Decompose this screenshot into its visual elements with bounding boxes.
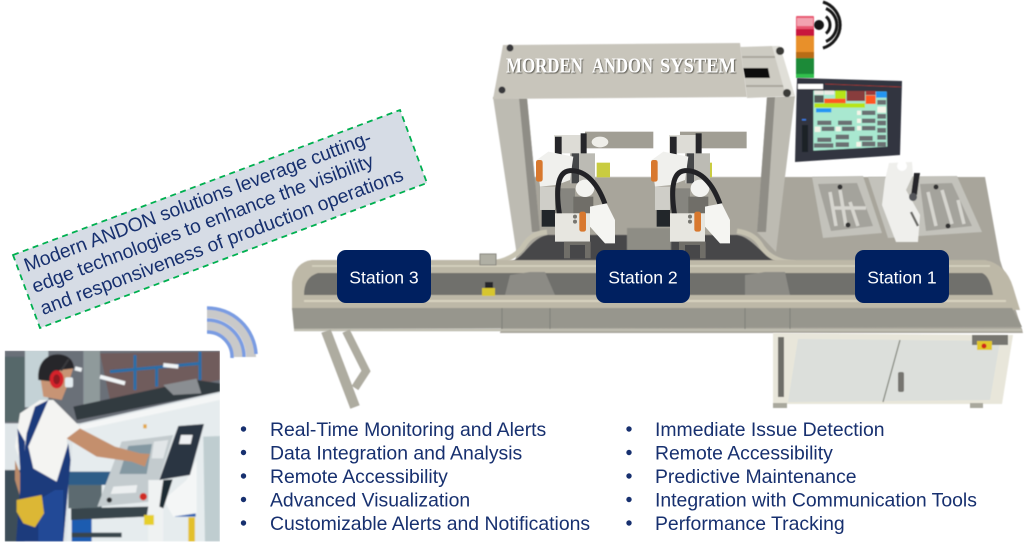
callout: modern ANDON solutions: edge technologies to enhance the visibility [29,150,377,298]
title: Morden Andon System [506,54,736,78]
icon: wireless signal near operator [207,308,256,358]
icon: broadcast signal [814,2,840,48]
machine: conveyor belt [292,254,1022,330]
machine: right frame column [757,96,795,252]
label: Station 2 [596,250,690,303]
machine: top plate [493,43,747,99]
machine: left frame column [493,97,540,256]
list: operational benefits: Immediate Issue Detection [655,419,885,441]
label: Station 3: Station 3 [349,268,419,288]
list: technology features: Real-Time Monitoring and Alerts [270,419,546,441]
machine: control cabinet [773,333,1013,408]
title: Morden Andon System: MORDEN [506,54,583,78]
machine: dark conveyor wells [490,228,795,263]
machine: robot station left [536,133,615,258]
machine: right parts tray and robot [868,161,982,242]
photo: operator at control panel [5,351,220,542]
list: technology features: Remote Accessibility [270,466,448,488]
title: Morden Andon System: SYSTEM [660,54,736,78]
icon: stack tower light [796,16,814,78]
machine: lime sensors [597,163,712,177]
label: Station 3 [337,250,431,303]
label: Station 1 [855,250,949,303]
machine: top frame rails [740,46,795,98]
list: operational benefits: Predictive Maintenance [655,466,857,488]
list: technology features: Data Integration and Analysis [270,442,522,464]
list: operational benefits: Integration with Communication Tools [655,490,977,512]
list: technology features [241,419,590,535]
list: operational benefits: Remote Accessibility [655,442,833,464]
panel: HMI touchscreen [795,78,902,162]
list: technology features: Advanced Visualization [270,490,470,512]
list: operational benefits: Performance Tracking [655,513,845,535]
label: Station 1: Station 1 [867,268,937,288]
label: Station 2: Station 2 [608,268,678,288]
machine: robot station right [651,133,730,258]
callout: modern ANDON solutions: Modern ANDON solutions leverage cutting- [21,127,374,277]
machine: base platform [500,177,1023,333]
callout: modern ANDON solutions: and responsiveness of production operations [37,164,406,320]
list: technology features: Customizable Alerts and Notifications [270,513,590,535]
machine: conveyor support leg [326,331,366,407]
title: Morden Andon System: ANDON [592,54,653,78]
list: operational benefits [626,419,977,535]
callout: modern ANDON solutions [13,110,427,328]
machine: back beam [585,132,747,148]
machine: left parts tray [812,176,882,238]
